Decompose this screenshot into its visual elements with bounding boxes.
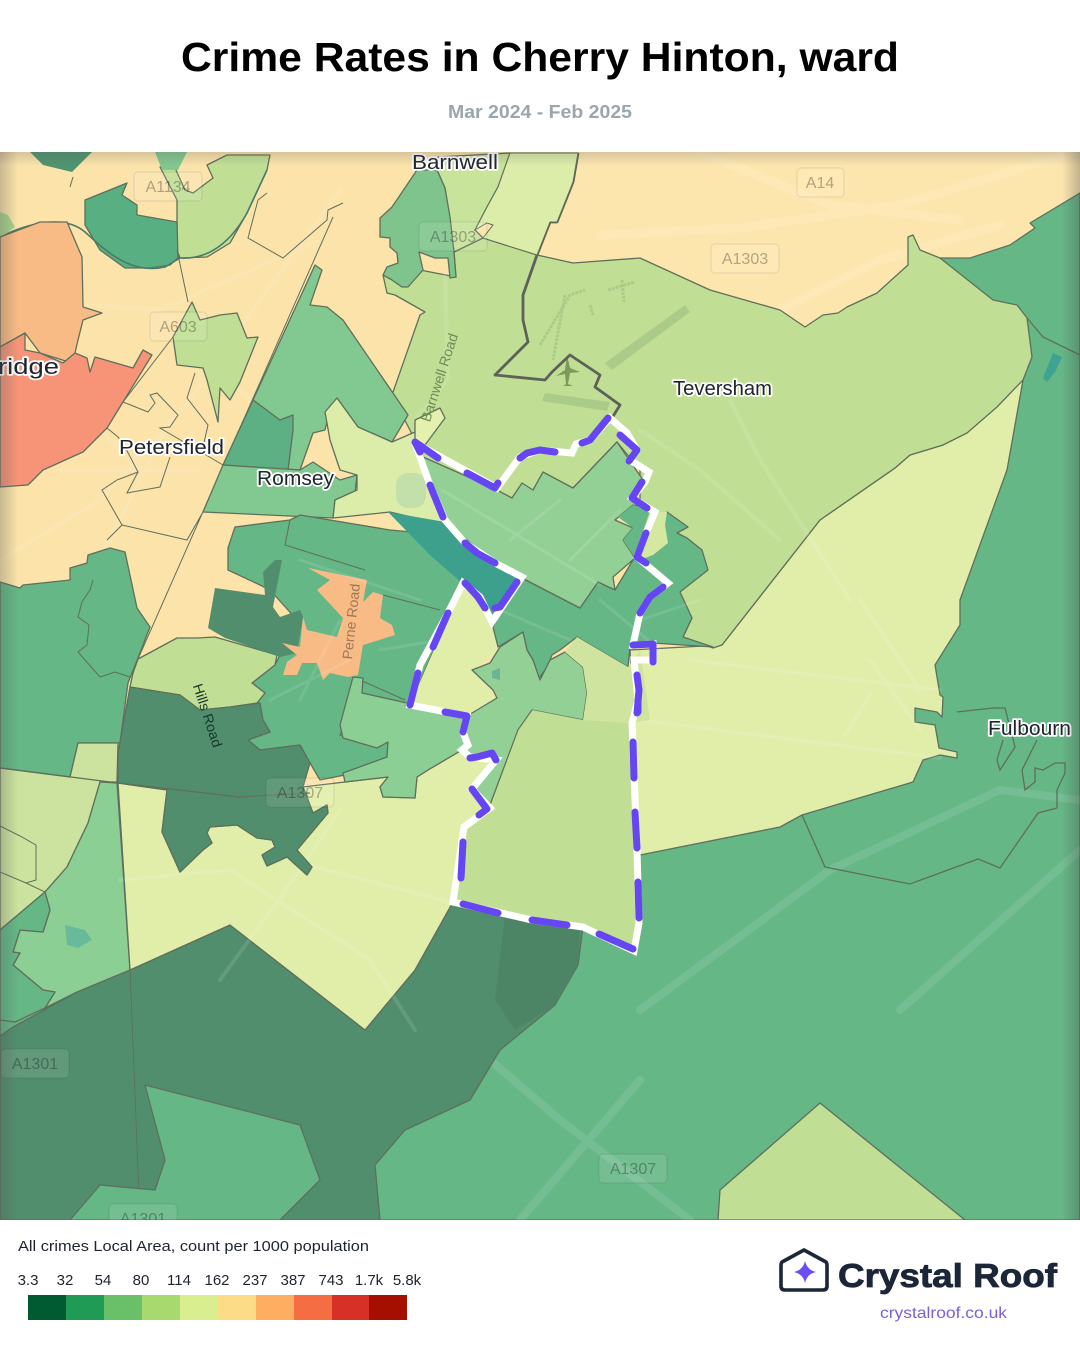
area: river ward dark green [85,183,178,268]
area: Teversham light green ward [383,235,1032,648]
legend values: 3.3 [18,1272,38,1289]
area: eastern and southern green zone [0,193,1080,1220]
area: A603 light green ward [173,302,258,422]
area: central mid green ward [462,632,587,808]
icon: house outline [781,1250,827,1290]
water: lake near Teversham [1043,353,1062,382]
legend colour scale [28,1295,407,1320]
badge: A1307 south [599,1154,667,1183]
badge: A1303 west: A1303 [430,229,476,246]
legend values: 32 [57,1272,73,1289]
area: Romsey lower mid green [203,462,357,518]
area: small green pocket [618,505,650,558]
legend values: 5.8k [393,1272,422,1289]
area: west green ward [0,548,150,777]
area: Hills Road dark green ward [118,687,328,875]
badge: A603: A603 [159,319,197,336]
badge: A1307 south: A1307 [610,1161,656,1178]
badge: A1301 west [1,1049,69,1078]
badge: A1303 east [711,244,779,273]
area: Barnwell Road pale tip [415,408,445,445]
label: Romsey: Romsey [257,468,334,490]
badge: A1134: A1134 [145,179,191,196]
road label: Barnwell Road: Barnwell Road [417,331,461,424]
website url: crystalroof.co.uk [880,1305,1008,1322]
badge: A14: A14 [806,175,834,192]
area: Barnwell light zones [437,153,578,255]
area: Perne Road orange ward [282,568,395,680]
area: south-west green ward [70,1085,320,1220]
badge: A1134 [134,172,202,201]
legend values: 80 [133,1272,149,1289]
legend values: 237 [242,1272,268,1289]
legend [18,1238,422,1320]
legend values: 54 [95,1272,111,1289]
badge: A1301 west: A1301 [12,1056,58,1073]
area: pale band south of Hills Road [118,747,493,1030]
area: east green ward cluster [493,512,713,680]
area: Cherry Hinton south light green [453,710,639,951]
icon: airport plane [556,355,580,386]
legend values: 114 [167,1272,191,1289]
ward outline: purple dashes [410,418,663,949]
road label: Hills Road: Hills Road [190,682,226,749]
title: Crime Rates in Cherry Hinton, ward [181,34,899,80]
area: eastern pale fields [630,380,1023,855]
area: pale triangle inside ward [410,583,500,716]
legend values: 387 [280,1272,306,1289]
area: north-west top dark patch [30,152,92,172]
area: pale strip east of central ward [565,637,650,723]
legend values: 162 [204,1272,230,1289]
area: city orange ward [0,222,102,363]
label: Teversham: Teversham [673,378,772,400]
ward outline: Cherry Hinton white line [410,418,668,951]
icon: purple star [794,1261,816,1283]
ward boundary: dark district line [495,153,620,418]
area: west pale green [0,743,118,930]
area: Hills Road light green [130,637,277,710]
subtitle: date range: Mar 2024 - Feb 2025 [448,102,632,122]
area: south dark green ward [0,902,583,1220]
airfield: runways [540,280,690,411]
area: Barnwell mid green ward [380,170,456,287]
area: Coleridge pale ward [325,398,445,525]
area: dark green block beside Perne [208,560,303,657]
legend values: 743 [318,1272,344,1289]
area: south-west mid green ward [340,677,467,798]
logo: Crystal Roof [781,1250,1058,1322]
badge: A1307 centre: A1307 [277,785,323,802]
label: Fulbourn: Fulbourn [988,718,1071,740]
logo wordmark: Crystal Roof [838,1257,1058,1294]
area: south-east light green corner [718,1103,965,1220]
badge: A1307 centre [266,778,334,807]
area: small pale notch [640,512,668,560]
area: teal high-contrast ward [388,512,522,620]
area: north-east low band [537,152,1080,327]
area: south-west green edge [0,892,55,1022]
badge: A1301 south [109,1204,177,1233]
badge: A14 [797,168,844,197]
badge: A1303 west [419,222,487,251]
label: Barnwell: Barnwell [412,152,498,174]
legend values: 1.7k [355,1272,384,1289]
area: Fulbourn inner ward outline [802,740,1065,884]
label: Petersfield: Petersfield [119,437,224,459]
badge: A1301 south: A1301 [120,1211,166,1228]
area: Romsey darker green [223,400,293,470]
road label: Perne Road: Perne Road [339,583,363,660]
area: small lake patch [396,473,426,508]
badge: A603 [150,312,207,341]
area: north mid green patch [155,152,187,170]
area: south-west mid green park [13,782,130,1008]
badge: A1303 east: A1303 [722,251,768,268]
legend values [18,1272,422,1289]
area: Romsey mid green wedge [223,265,408,470]
area: north-west light green [160,155,270,258]
area: north ward mid green [423,442,647,608]
legend title: All crimes Local Area, count per 1000 population [18,1238,369,1255]
area: Perne green ward [227,514,478,781]
area: city salmon ward [0,333,152,487]
